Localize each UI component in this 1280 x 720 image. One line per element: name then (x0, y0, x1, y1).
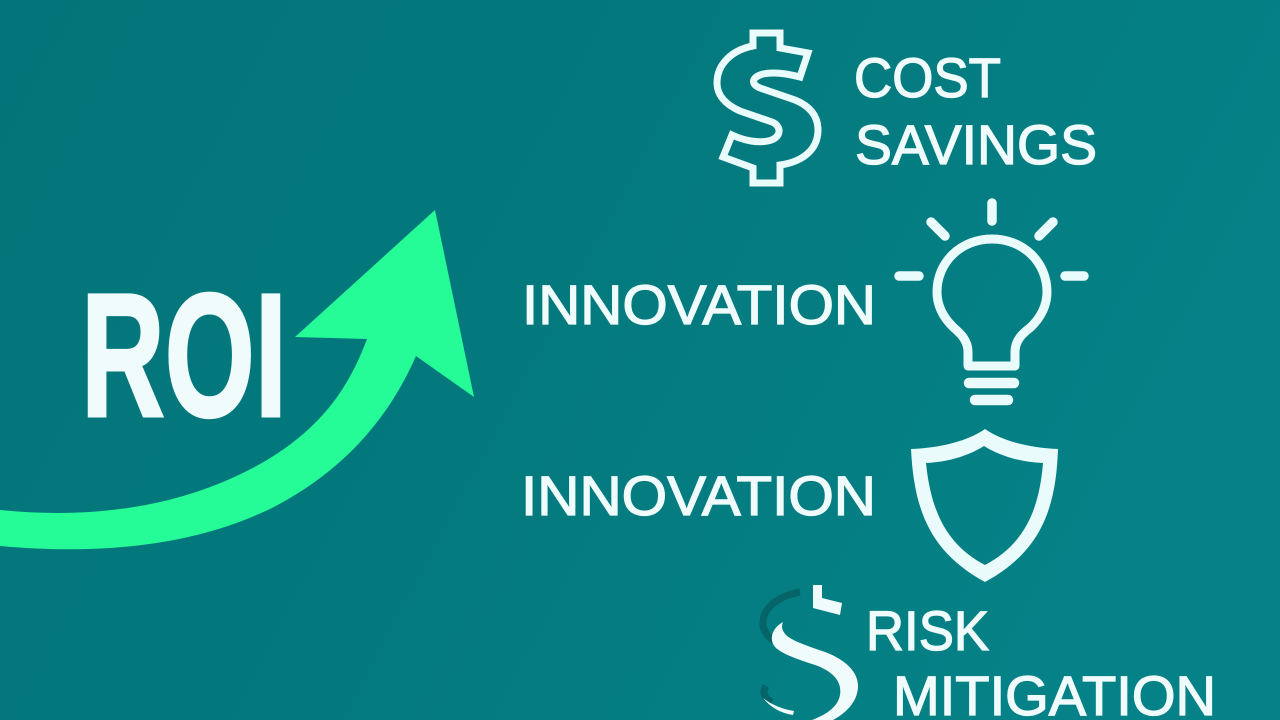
icon: partial dollar (763, 585, 858, 720)
growth arrow (0, 210, 474, 549)
icon: light bulb (899, 203, 1084, 400)
heading: ROI: ROI (81, 258, 287, 454)
label: risk mitigation: RISK (866, 599, 989, 662)
label: cost savings: SAVINGS (855, 113, 1097, 176)
label: innovation (second): INNOVATION (521, 464, 876, 527)
label: risk mitigation (866, 599, 1216, 720)
label: cost savings: COST (854, 46, 1001, 109)
label: cost savings (854, 46, 1097, 176)
icon: shield (911, 429, 1058, 582)
label: innovation: INNOVATION (522, 273, 876, 336)
icon: dollar outline (717, 33, 818, 183)
